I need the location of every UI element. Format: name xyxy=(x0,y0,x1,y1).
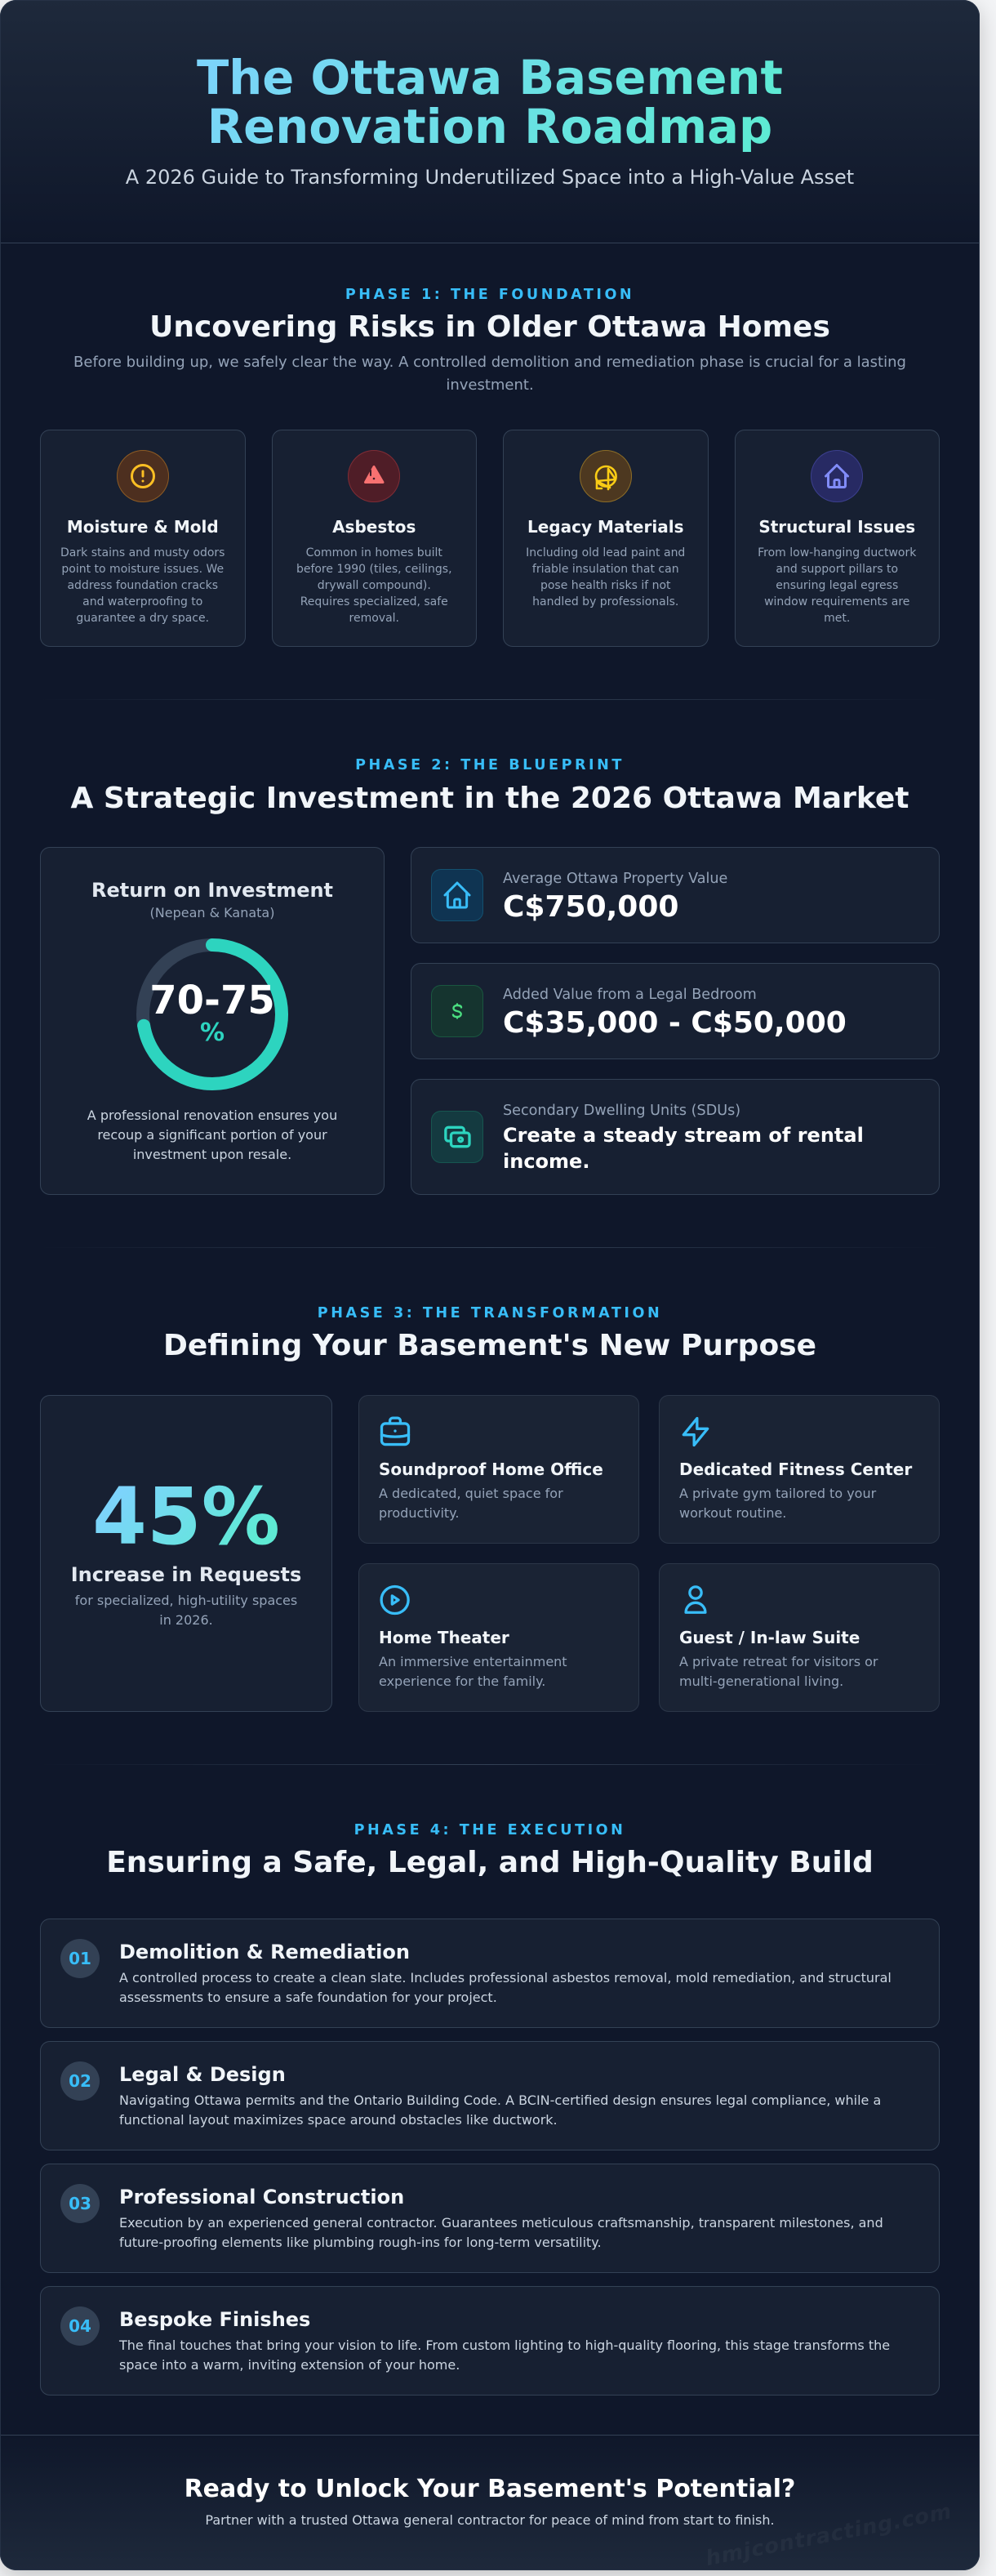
phase 1 eyebrow: PHASE 1: THE FOUNDATION xyxy=(345,287,634,303)
panel: 45 percent statistic xyxy=(40,1395,332,1712)
donut value: 70-75 xyxy=(149,978,275,1023)
step title: Demolition & Remediation xyxy=(119,1941,410,1963)
stat label: Average Ottawa Property Value xyxy=(503,871,727,887)
step title: Professional Construction xyxy=(119,2186,404,2208)
step text: Navigating Ottawa permits and the Ontario Building Code. A BCIN-certified design ensures legal compliance, while a xyxy=(119,2092,881,2108)
stat label: Added Value from a Legal Bedroom xyxy=(503,987,757,1003)
feature text: A private gym tailored to your xyxy=(679,1486,876,1501)
phase 3 heading: Defining Your Basement's New Purpose xyxy=(163,1329,816,1362)
step title: Legal & Design xyxy=(119,2063,286,2086)
phase 2 eyebrow: PHASE 2: THE BLUEPRINT xyxy=(355,757,625,773)
stat card: property value xyxy=(411,847,940,943)
panel: return on investment xyxy=(40,847,385,1195)
icon: play circle xyxy=(380,1584,410,1616)
phase 3 eyebrow: PHASE 3: THE TRANSFORMATION xyxy=(318,1305,662,1321)
panel text: A professional renovation ensures you xyxy=(87,1108,337,1123)
step 3 xyxy=(40,2164,940,2273)
stat text: for specialized, high-utility spaces xyxy=(75,1593,297,1608)
icon: dollar xyxy=(431,985,483,1037)
risk card: legacy materials xyxy=(503,430,709,647)
feature text xyxy=(379,1654,567,1689)
step title: Bespoke Finishes xyxy=(119,2308,310,2331)
donut percent sign: % xyxy=(200,1018,225,1047)
feature card: fitness center xyxy=(659,1395,940,1544)
card title: Structural Issues xyxy=(758,517,915,537)
stat label: Secondary Dwelling Units (SDUs) xyxy=(503,1103,740,1119)
card text: address foundation cracks xyxy=(67,579,218,592)
card text: Common in homes built xyxy=(306,546,442,559)
risk card: asbestos xyxy=(271,430,477,647)
feature text: multi-generational living. xyxy=(679,1674,843,1689)
step number: 03 xyxy=(69,2194,91,2213)
feature card: home office xyxy=(358,1395,639,1544)
step 1 xyxy=(40,1919,940,2028)
icon: exclamation circle xyxy=(117,450,169,502)
icon: person xyxy=(684,1585,707,1614)
panel subtitle: (Nepean & Kanata) xyxy=(150,905,274,920)
step number xyxy=(60,1939,100,1978)
card title: Moisture & Mold xyxy=(67,517,219,537)
title: The Ottawa Basement xyxy=(197,51,783,105)
icon: house xyxy=(431,869,483,921)
step text: future-proofing elements like plumbing rough-ins for long-term versatility. xyxy=(119,2235,602,2250)
stat card: legal bedroom xyxy=(411,963,940,1059)
feature title: Home Theater xyxy=(379,1628,509,1647)
feature text: An immersive entertainment xyxy=(379,1654,567,1669)
card text: guarantee a dry space. xyxy=(76,612,209,625)
card text xyxy=(758,546,916,625)
feature card: guest suite xyxy=(659,1563,940,1712)
card title: Legacy Materials xyxy=(527,517,683,537)
card text: before 1990 (tiles, ceilings, xyxy=(296,563,452,576)
step number: 01 xyxy=(69,1949,91,1968)
subtitle: A 2026 Guide to Transforming Underutilized Space into a High-Value Asset xyxy=(126,166,854,189)
stat value: income. xyxy=(503,1150,589,1173)
phase 1 intro text: investment. xyxy=(446,377,534,394)
panel text xyxy=(87,1108,337,1162)
card text: Dark stains and musty odors xyxy=(60,546,225,559)
stat title: Increase in Requests xyxy=(71,1563,301,1586)
feature card: home theater xyxy=(358,1563,639,1712)
icon: banknotes xyxy=(431,1111,483,1163)
feature text: productivity. xyxy=(379,1505,459,1521)
feature text: workout routine. xyxy=(679,1505,786,1521)
step text: Execution by an experienced general contractor. Guarantees meticulous craftsmanship, transparent milestones, and xyxy=(119,2215,883,2231)
card text: Including old lead paint and xyxy=(526,546,685,559)
step number xyxy=(60,2184,100,2223)
card text: handled by professionals. xyxy=(532,595,678,608)
footer panel xyxy=(0,2435,980,2570)
feature text xyxy=(679,1486,877,1521)
title: Renovation Roadmap xyxy=(207,100,772,154)
feature text: A dedicated, quiet space for xyxy=(379,1486,563,1501)
phase 1 heading: Uncovering Risks in Older Ottawa Homes xyxy=(149,310,830,344)
card text xyxy=(60,546,225,625)
donut chart: 70-75 percent xyxy=(136,938,288,1090)
feature text: A private retreat for visitors or xyxy=(679,1654,878,1669)
feature text xyxy=(679,1654,878,1689)
card text: met. xyxy=(824,612,850,625)
feature text: experience for the family. xyxy=(379,1674,545,1689)
step text xyxy=(119,1970,892,2005)
card text: pose health risks if not xyxy=(540,579,671,592)
feature text xyxy=(379,1486,563,1521)
icon: overlapping circle and lines xyxy=(580,450,632,502)
step text: space into a warm, inviting extension of your home. xyxy=(119,2357,460,2373)
step text: assessments to ensure a safe foundation for your project. xyxy=(119,1990,497,2005)
stat value: C$35,000 - C$50,000 xyxy=(503,1006,847,1040)
footer heading: Ready to Unlock Your Basement's Potential? xyxy=(185,2475,795,2503)
card text xyxy=(296,546,452,625)
card text: and waterproofing to xyxy=(82,595,202,608)
card text: point to moisture issues. We xyxy=(61,563,224,576)
card text: drywall compound). xyxy=(318,579,431,592)
card text: window requirements are xyxy=(764,595,909,608)
stat text: in 2026. xyxy=(159,1612,213,1628)
step text xyxy=(119,2338,890,2373)
footer text: Partner with a trusted Ottawa general contractor for peace of mind from start to finish. xyxy=(205,2512,775,2528)
card text: Requires specialized, safe xyxy=(300,595,448,608)
card text: and support pillars to xyxy=(776,563,898,576)
step text xyxy=(119,2092,881,2128)
panel title: Return on Investment xyxy=(91,879,333,902)
step 2 xyxy=(40,2041,940,2150)
card text: From low-hanging ductwork xyxy=(758,546,916,559)
stat card: secondary dwelling units xyxy=(411,1079,940,1195)
phase 4 eyebrow: PHASE 4: THE EXECUTION xyxy=(354,1822,625,1838)
card title: Asbestos xyxy=(332,517,416,537)
card text xyxy=(526,546,685,608)
stat text xyxy=(75,1593,297,1628)
panel text: investment upon resale. xyxy=(133,1147,291,1162)
step 4 xyxy=(40,2286,940,2396)
phase 1 intro text: Before building up, we safely clear the way. A controlled demolition and remediation phase is crucial for a lasting xyxy=(73,354,906,371)
big number: 45% xyxy=(92,1471,280,1562)
step number: 04 xyxy=(69,2316,91,2336)
phase 1 intro text xyxy=(73,354,906,394)
stat value: C$750,000 xyxy=(503,890,678,924)
step number: 02 xyxy=(69,2071,91,2091)
stat value: Create a steady stream of rental xyxy=(503,1124,864,1147)
risk card: moisture and mold xyxy=(40,430,245,647)
feature title: Guest / In-law Suite xyxy=(679,1628,860,1647)
phase 4 heading: Ensuring a Safe, Legal, and High-Quality Build xyxy=(106,1846,874,1879)
step number xyxy=(60,2306,100,2346)
icon: lightning bolt xyxy=(683,1416,709,1447)
phase 2 heading: A Strategic Investment in the 2026 Ottawa Market xyxy=(71,782,909,815)
step number xyxy=(60,2061,100,2101)
icon: house xyxy=(811,450,863,502)
watermark: hmjcontracting.com xyxy=(704,2499,954,2570)
header panel xyxy=(0,0,980,243)
risk card: structural issues xyxy=(735,430,940,647)
step text xyxy=(119,2215,883,2250)
step text: functional layout maximizes space around obstacles like ductwork. xyxy=(119,2112,558,2128)
title xyxy=(197,51,783,154)
card text: ensuring legal egress xyxy=(776,579,898,592)
stat value xyxy=(503,1124,864,1173)
step text: A controlled process to create a clean slate. Includes professional asbestos removal, mold remediation, and structural xyxy=(119,1970,892,1985)
panel text: recoup a significant portion of your xyxy=(97,1127,327,1143)
card text: friable insulation that can xyxy=(532,563,679,576)
feature title: Soundproof Home Office xyxy=(379,1460,603,1479)
card text: removal. xyxy=(349,612,399,625)
step text: The final touches that bring your vision to life. From custom lighting to high-quality flooring, this stage transforms the xyxy=(119,2338,890,2353)
feature title: Dedicated Fitness Center xyxy=(679,1460,912,1479)
icon: briefcase xyxy=(380,1416,410,1446)
icon: warning triangle xyxy=(348,450,400,502)
